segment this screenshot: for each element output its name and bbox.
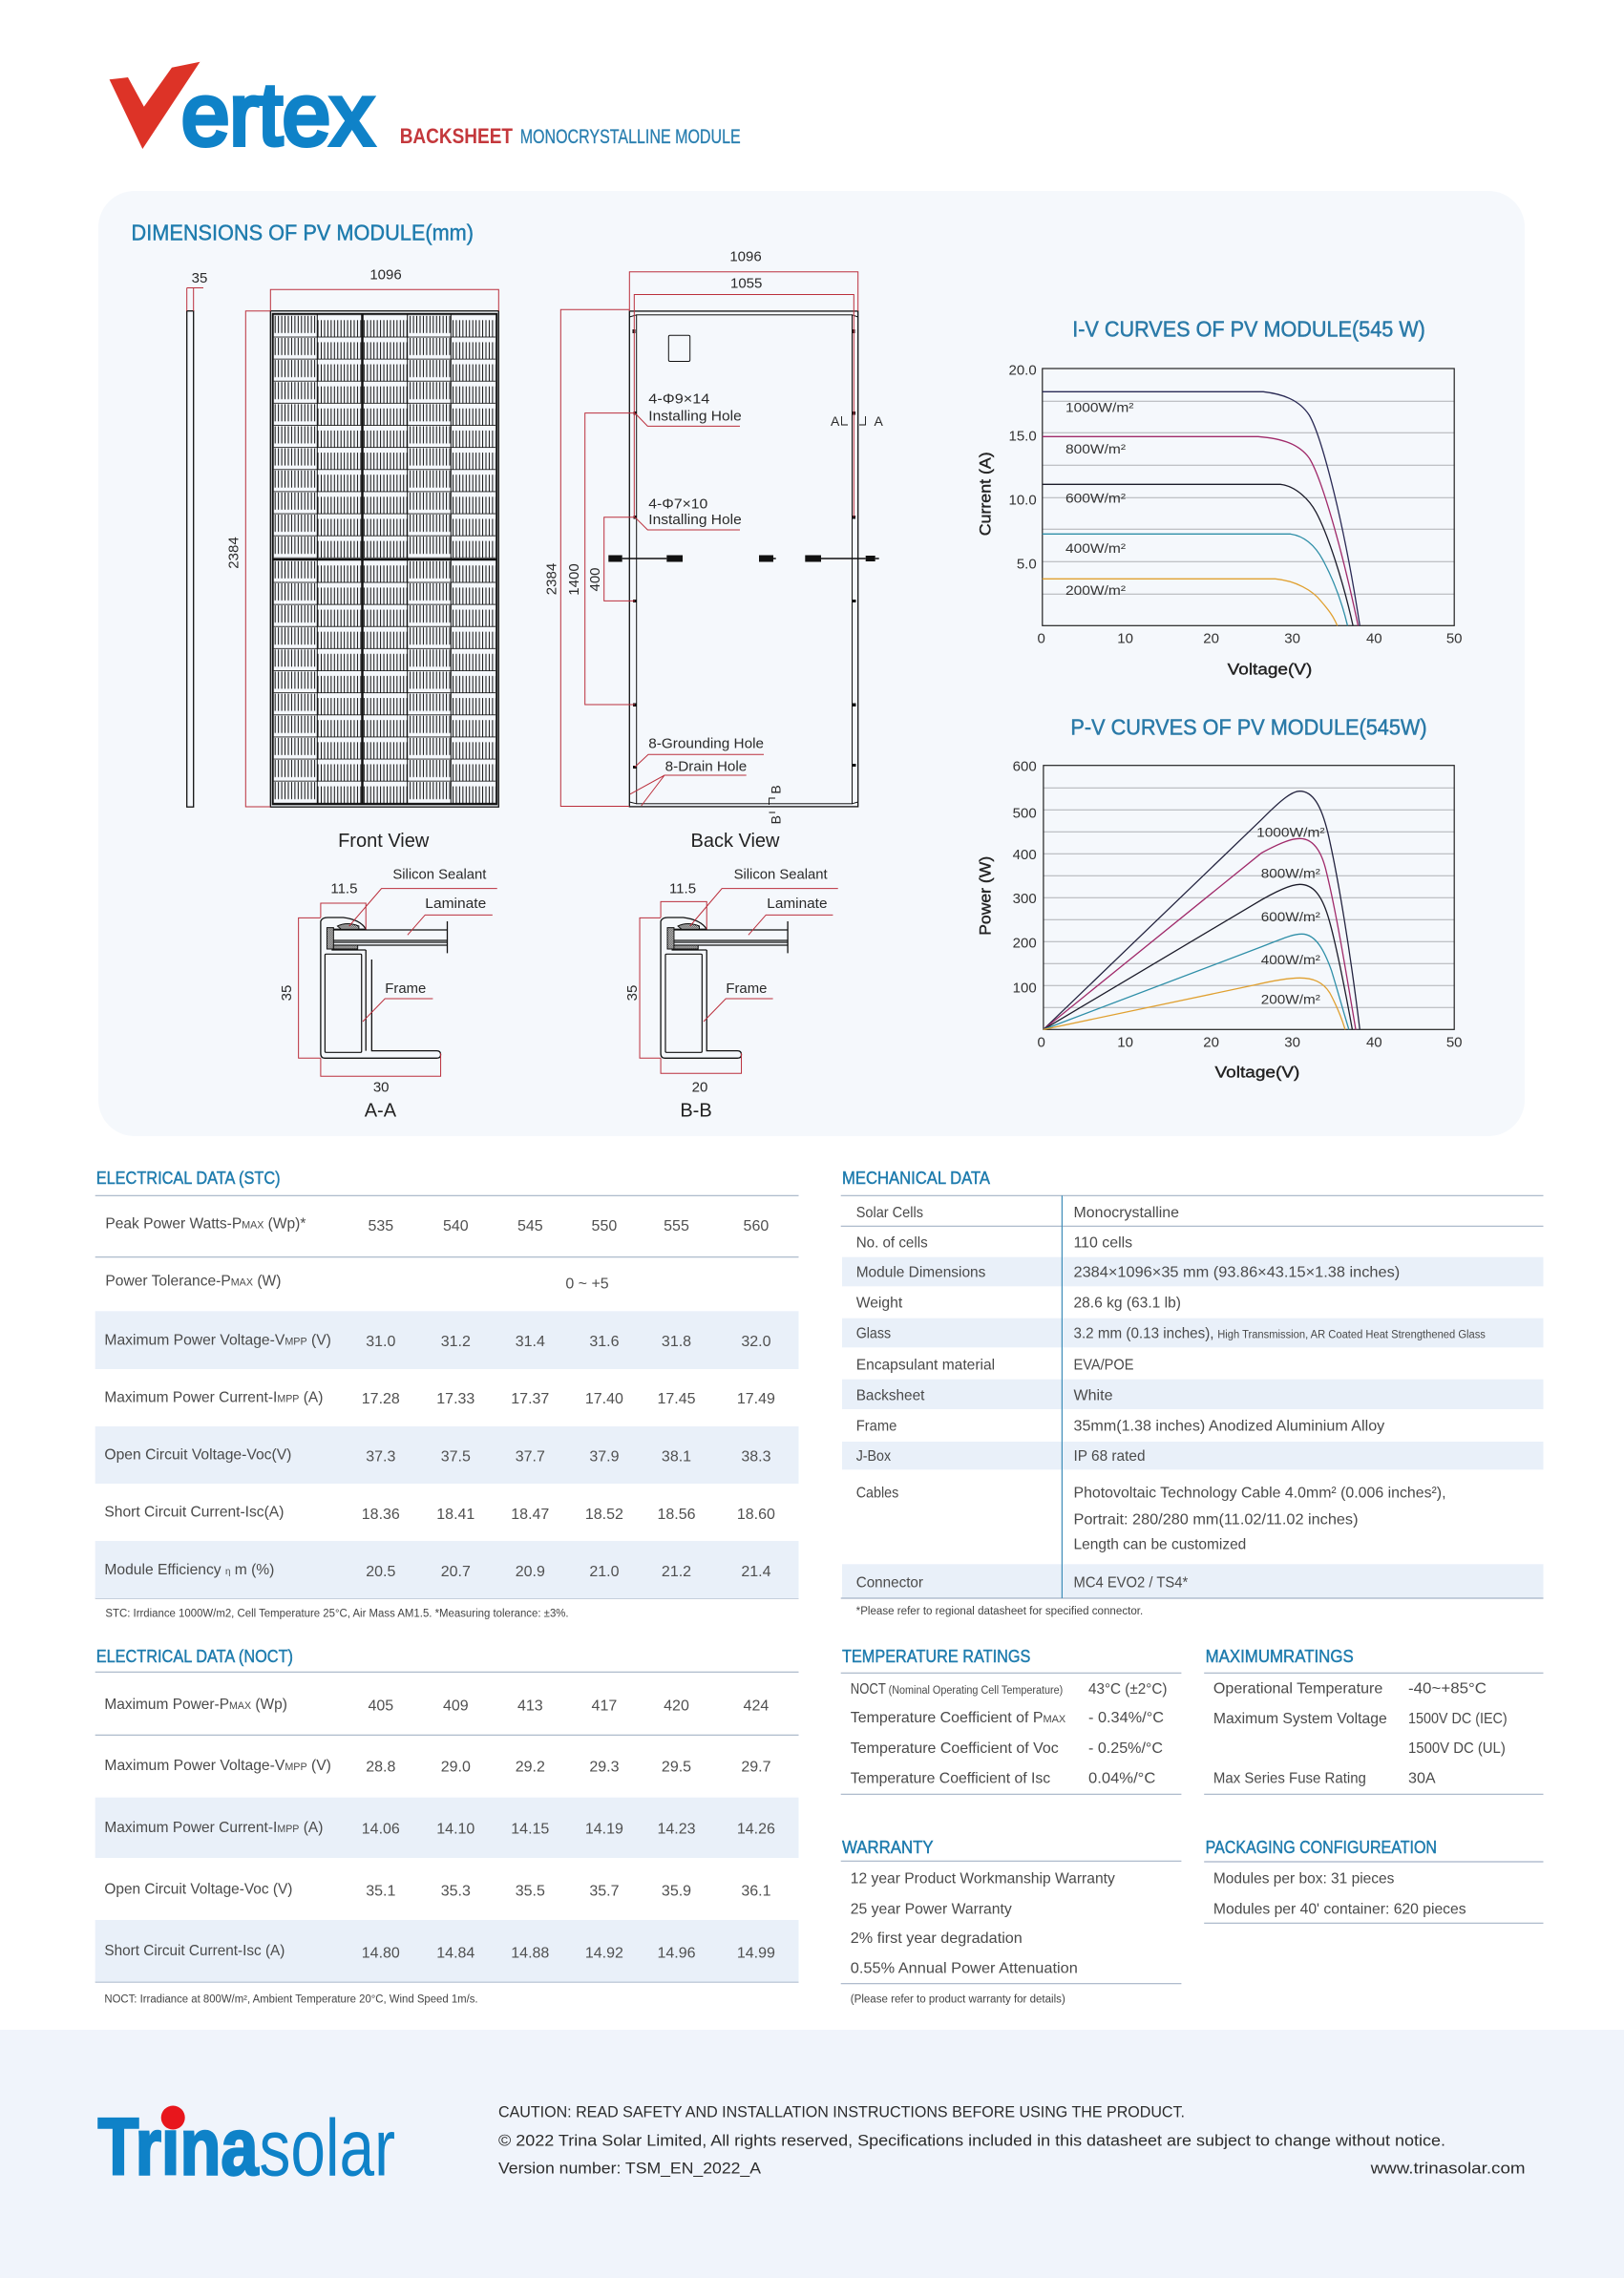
section drawing: B-B: 20 xyxy=(692,1079,707,1095)
table: maximum ratings: 1500V DC (IEC) xyxy=(1408,1711,1508,1727)
section drawing: B-B: 11.5 xyxy=(669,881,696,897)
chart: P-V curves: 0 xyxy=(1038,1035,1045,1051)
row: module efficiency: 21.4 xyxy=(741,1564,771,1580)
row: Isc NOCT: Short Circuit Current-Isc (A) xyxy=(104,1943,285,1959)
row: module dimensions: 2384×1096×35 mm (93.86×43.15×1.38 inches) xyxy=(1073,1265,1400,1281)
row: Isc: 18.56 xyxy=(657,1507,696,1523)
row: cables: Portrait: 280/280 mm(11.02/11.02 inches) xyxy=(1073,1512,1358,1529)
row: peak power: 545 xyxy=(517,1218,543,1234)
table: temperature ratings: 43°C (±2°C) xyxy=(1088,1681,1167,1698)
heading: dimensions: DIMENSIONS OF PV MODULE(mm) xyxy=(132,221,474,245)
row: Voc: 37.9 xyxy=(589,1449,620,1466)
footnote: NOCT: NOCT: Irradiance at 800W/m², Ambient Temperature 20°C, Wind Speed 1m/s. xyxy=(104,1994,478,2006)
chart: P-V curves: 100 xyxy=(1013,980,1037,996)
chart: P-V curves: 400W/m² xyxy=(1261,952,1320,967)
row: maximum power: 409 xyxy=(443,1698,469,1715)
row: j-box: J-Box xyxy=(856,1448,891,1465)
row: connector: MC4 EVO2 / TS4* xyxy=(1073,1575,1188,1592)
row: peak power: 560 xyxy=(744,1218,769,1234)
row: Vmpp: 31.8 xyxy=(662,1334,691,1350)
back view drawing: 4-Φ9×14 xyxy=(648,391,709,408)
row: solar cells xyxy=(856,1205,1179,1221)
row: Vmpp NOCT: 29.3 xyxy=(589,1760,620,1776)
table: maximum ratings: Max Series Fuse Rating xyxy=(1213,1771,1366,1787)
section drawing: B-B xyxy=(624,867,838,1121)
row: maximum power: 420 xyxy=(664,1698,689,1715)
row: Isc NOCT: 14.88 xyxy=(511,1946,549,1962)
footer caution text: © 2022 Trina Solar Limited, All rights reserved, Specifications included in this datasheet are subject to change without notice. xyxy=(498,2131,1445,2149)
row: connector: Connector xyxy=(856,1575,924,1592)
row: Voc NOCT: 35.9 xyxy=(662,1884,691,1900)
front view drawing: 2384 xyxy=(225,537,243,569)
row: no. of cells: No. of cells xyxy=(856,1235,928,1252)
chart: P-V curves: 200W/m² xyxy=(1261,992,1320,1007)
section drawing: A-A xyxy=(279,867,497,1121)
section drawing: A-A: 35 xyxy=(279,985,295,1001)
row: Voc: 38.1 xyxy=(662,1449,691,1466)
back view drawing: 1400 xyxy=(566,563,582,596)
chart: I-V curves: 5.0 xyxy=(1017,557,1037,573)
side view drawing xyxy=(187,270,207,807)
row: j-box: IP 68 rated xyxy=(1073,1448,1146,1465)
row: Impp NOCT: Maximum Power Current-IMPP (A) xyxy=(104,1820,323,1836)
row: module efficiency: 21.0 xyxy=(589,1564,620,1580)
chart title: P-V: P-V CURVES OF PV MODULE(545W) xyxy=(1070,714,1427,739)
section drawing: A-A: 11.5 xyxy=(330,881,357,897)
row: Voc NOCT: 36.1 xyxy=(741,1884,771,1900)
table: maximum ratings: 30A xyxy=(1408,1771,1436,1787)
chart: I-V curves: 15.0 xyxy=(1008,429,1037,445)
row: Voc xyxy=(95,1426,798,1484)
table: temperature ratings: Temperature Coefficient of Voc xyxy=(851,1740,1059,1757)
row: Isc NOCT: 14.80 xyxy=(362,1946,400,1962)
chart: P-V curves: 300 xyxy=(1013,891,1037,907)
table: maximum ratings xyxy=(1204,1647,1543,1794)
row: Voc NOCT: 35.1 xyxy=(366,1884,395,1900)
chart: I-V curves: 20 xyxy=(1203,630,1219,646)
chart: P-V curves: 1000W/m² xyxy=(1256,825,1325,840)
heading: mechanical data: MECHANICAL DATA xyxy=(842,1169,990,1188)
row: Impp: 17.49 xyxy=(737,1391,775,1407)
table: temperature ratings: - 0.25%/°C xyxy=(1088,1740,1163,1757)
row: Voc: 37.7 xyxy=(516,1449,545,1466)
row: power tolerance: Power Tolerance-PMAX (W) xyxy=(105,1274,281,1290)
row: frame: Frame xyxy=(856,1418,896,1434)
row: Vmpp NOCT: 29.5 xyxy=(662,1760,691,1776)
table: maximum ratings: 1500V DC (UL) xyxy=(1408,1740,1506,1757)
heading: electrical data NOCT: ELECTRICAL DATA (NOCT) xyxy=(96,1647,293,1666)
row: Vmpp NOCT: Maximum Power Voltage-VMPP (V) xyxy=(104,1758,331,1774)
row: glass: High Transmission, AR Coated Heat Strengthened Glass xyxy=(1217,1330,1486,1341)
subtitle: backsheet monocrystalline module: BACKSHEET xyxy=(400,124,513,148)
row: Impp: 17.37 xyxy=(511,1391,549,1407)
table: maximum ratings: Maximum System Voltage xyxy=(1213,1711,1387,1727)
row: Impp: Maximum Power Current-IMPP (A) xyxy=(104,1389,323,1405)
table: electrical data NOCT xyxy=(95,1647,798,2006)
row: Impp NOCT xyxy=(95,1798,798,1858)
row: solar cells: Monocrystalline xyxy=(1073,1205,1179,1221)
chart: I-V curves: 40 xyxy=(1366,630,1382,646)
chart: P-V curves: 50 xyxy=(1446,1035,1463,1051)
chart: P-V curves: Voltage(V) xyxy=(1214,1063,1299,1081)
row: Voc NOCT: 35.3 xyxy=(441,1884,471,1900)
back view drawing: 400 xyxy=(587,567,603,592)
table: warranty: 12 year Product Workmanship Warranty xyxy=(851,1870,1115,1887)
heading: electrical data STC: ELECTRICAL DATA (STC) xyxy=(96,1169,281,1188)
table: maximum ratings: -40~+85°C xyxy=(1408,1680,1487,1697)
row: Isc: 18.60 xyxy=(737,1507,775,1523)
chart: I-V curves xyxy=(976,316,1463,679)
row: power tolerance xyxy=(105,1274,609,1292)
row: frame: 35mm(1.38 inches) Anodized Aluminium Alloy xyxy=(1073,1418,1384,1434)
row: Impp xyxy=(104,1389,775,1407)
front view drawing: 1096 xyxy=(369,267,402,284)
row: Isc NOCT: 14.92 xyxy=(585,1946,623,1962)
heading: temperature ratings: TEMPERATURE RATINGS xyxy=(842,1647,1030,1666)
row: Isc NOCT: 14.99 xyxy=(737,1946,775,1962)
row: Impp: 17.40 xyxy=(585,1391,623,1407)
row: Isc: 18.41 xyxy=(436,1507,475,1523)
chart: P-V curves: 800W/m² xyxy=(1261,865,1320,880)
chart: P-V curves: 600W/m² xyxy=(1261,909,1320,924)
back view drawing: 1055 xyxy=(730,275,762,291)
row: weight xyxy=(856,1295,1181,1311)
row: Vmpp: 32.0 xyxy=(741,1334,771,1350)
table: temperature ratings: (Nominal Operating Cell Temperature) xyxy=(889,1685,1063,1697)
back view drawing: A xyxy=(875,413,884,429)
row: backsheet xyxy=(856,1388,1113,1404)
row: connector xyxy=(856,1575,1188,1592)
chart: I-V curves: 10.0 xyxy=(1008,492,1037,508)
chart: P-V curves xyxy=(976,714,1463,1081)
row: Impp NOCT: 14.26 xyxy=(737,1822,775,1838)
table: packaging configuration: Modules per box: 31 pieces xyxy=(1213,1870,1394,1887)
table: packaging configuration: Modules per 40' container: 620 pieces xyxy=(1213,1901,1466,1917)
row: peak power: Peak Power Watts-PMAX (Wp)* xyxy=(105,1216,306,1233)
chart: I-V curves: 20.0 xyxy=(1008,363,1037,379)
panel: dimensions and curves xyxy=(98,191,1525,1136)
subtitle: backsheet monocrystalline module xyxy=(400,124,741,148)
row: module efficiency: 20.9 xyxy=(516,1564,545,1580)
chart: I-V curves: 600W/m² xyxy=(1065,491,1126,506)
chart: I-V curves: 800W/m² xyxy=(1065,441,1126,456)
section drawing: A-A: Frame xyxy=(385,981,426,997)
row: peak power xyxy=(105,1216,769,1234)
heading: maximum ratings: MAXIMUMRATINGS xyxy=(1206,1647,1354,1666)
row: Vmpp NOCT xyxy=(104,1758,771,1776)
chart: P-V curves: 40 xyxy=(1366,1035,1382,1051)
chart: P-V curves: Power (W) xyxy=(976,856,995,936)
section drawing: B-B: Laminate xyxy=(767,896,827,912)
row: module dimensions: Module Dimensions xyxy=(856,1265,985,1281)
row: frame xyxy=(856,1418,1384,1434)
row: cables: Cables xyxy=(856,1486,898,1502)
row: Vmpp NOCT: 29.2 xyxy=(516,1760,545,1776)
chart: I-V curves: Voltage(V) xyxy=(1228,661,1312,679)
row: module efficiency: 20.7 xyxy=(441,1564,471,1580)
row: maximum power xyxy=(104,1697,769,1715)
row: solar cells: Solar Cells xyxy=(856,1205,923,1221)
chart: P-V curves: 200 xyxy=(1013,936,1037,952)
footnote: STC: STC: Irrdiance 1000W/m2, Cell Temperature 25°C, Air Mass AM1.5. *Measuring tolerance: ±3%. xyxy=(105,1608,569,1619)
chart: P-V curves: 600 xyxy=(1013,758,1037,774)
row: maximum power: 424 xyxy=(744,1698,769,1715)
section drawing: A-A: Silicon Sealant xyxy=(392,867,487,883)
logo: Trinasolar xyxy=(97,2101,395,2192)
back view drawing xyxy=(544,249,884,824)
table: mechanical data xyxy=(841,1169,1543,1617)
section drawing: A-A: Laminate xyxy=(425,896,486,912)
row: module efficiency xyxy=(95,1541,798,1598)
label: back view: Back View xyxy=(690,831,780,852)
row: peak power: 550 xyxy=(592,1218,617,1234)
row: Impp NOCT: 14.15 xyxy=(511,1822,549,1838)
chart: I-V curves: 10 xyxy=(1117,630,1133,646)
row: module efficiency: Module Efficiency η m (%) xyxy=(104,1562,274,1578)
row: Impp NOCT: 14.23 xyxy=(657,1822,696,1838)
row: module dimensions xyxy=(856,1265,1400,1281)
row: power tolerance: 0 ~ +5 xyxy=(565,1276,609,1292)
row: maximum power: 417 xyxy=(592,1698,617,1715)
section drawing: B-B: Frame xyxy=(726,981,767,997)
row: Vmpp: 31.0 xyxy=(366,1334,395,1350)
row: Impp: 17.33 xyxy=(436,1391,475,1407)
row: Voc NOCT xyxy=(104,1881,771,1900)
row: weight: Weight xyxy=(856,1295,903,1311)
row: Isc: 18.52 xyxy=(585,1507,623,1523)
row: Impp NOCT: 14.10 xyxy=(436,1822,475,1838)
row: Isc xyxy=(104,1504,775,1523)
back view drawing: B xyxy=(768,785,783,794)
chart title: I-V: I-V CURVES OF PV MODULE(545 W) xyxy=(1072,316,1425,341)
section drawing: A-A: A-A xyxy=(365,1100,397,1121)
back view drawing: Installing Hole xyxy=(648,409,742,424)
row: backsheet: White xyxy=(1073,1388,1113,1404)
row: Vmpp: 31.2 xyxy=(441,1334,471,1350)
back view drawing: 8-Grounding Hole xyxy=(648,736,764,752)
row: Isc: 18.36 xyxy=(362,1507,400,1523)
footer caution text: CAUTION: READ SAFETY AND INSTALLATION INSTRUCTIONS BEFORE USING THE PRODUCT. xyxy=(498,2103,1185,2121)
back view drawing: B xyxy=(768,815,783,824)
connector cables xyxy=(608,556,879,561)
table: temperature ratings: - 0.34%/°C xyxy=(1088,1710,1164,1726)
table: temperature ratings: 0.04%/°C xyxy=(1088,1771,1155,1787)
row: glass: Glass xyxy=(856,1326,891,1342)
table: electrical data STC xyxy=(95,1169,798,1619)
row: Isc NOCT xyxy=(95,1920,798,1982)
row: peak power: 555 xyxy=(664,1218,689,1234)
footer caution text xyxy=(498,2103,1445,2178)
row: cables: Photovoltaic Technology Cable 4.0mm² (0.006 inches²), xyxy=(1073,1486,1445,1502)
table: temperature ratings: Temperature Coefficient of PMAX xyxy=(851,1710,1066,1726)
row: Voc: 37.3 xyxy=(366,1449,395,1466)
row: cables xyxy=(856,1486,1445,1553)
row: peak power: 535 xyxy=(368,1218,393,1234)
I-V curves lines xyxy=(1043,391,1360,625)
table: temperature ratings: NOCT xyxy=(851,1681,886,1698)
row: maximum power: Maximum Power-PMAX (Wp) xyxy=(104,1697,287,1713)
heading: warranty: WARRANTY xyxy=(842,1838,934,1857)
row: no. of cells xyxy=(856,1235,1132,1252)
back view drawing: 4-Φ7×10 xyxy=(648,496,707,513)
footnote: connector: *Please refer to regional datasheet for specified connector. xyxy=(856,1606,1143,1617)
chart: I-V curves: 0 xyxy=(1038,630,1045,646)
row: encapsulant: Encapsulant material xyxy=(856,1358,995,1374)
row: Isc: Short Circuit Current-Isc(A) xyxy=(104,1504,284,1520)
row: maximum power: 405 xyxy=(368,1698,393,1715)
table: warranty: 2% first year degradation xyxy=(851,1930,1023,1947)
table: temperature ratings: Temperature Coefficient of Isc xyxy=(851,1771,1050,1787)
row: Impp: 17.45 xyxy=(657,1391,696,1407)
row: backsheet: Backsheet xyxy=(856,1388,925,1404)
subtitle: backsheet monocrystalline module: MONOCRYSTALLINE MODULE xyxy=(520,126,741,148)
row: module efficiency: 21.2 xyxy=(662,1564,691,1580)
row: Vmpp NOCT: 28.8 xyxy=(366,1760,395,1776)
heading: packaging configuration: PACKAGING CONFIGUREATION xyxy=(1206,1838,1437,1857)
chart: P-V curves: 500 xyxy=(1013,806,1037,822)
row: Voc NOCT: 35.5 xyxy=(516,1884,545,1900)
row: Isc NOCT: 14.84 xyxy=(436,1946,475,1962)
chart: I-V curves: 200W/m² xyxy=(1065,582,1126,598)
row: Voc: 38.3 xyxy=(741,1449,771,1466)
row: no. of cells: 110 cells xyxy=(1073,1235,1132,1252)
table: temperature ratings xyxy=(841,1647,1181,1794)
row: peak power: 540 xyxy=(443,1218,469,1234)
footer band xyxy=(0,2030,1624,2278)
footer caution text: Version number: TSM_EN_2022_A xyxy=(498,2160,762,2178)
chart: I-V curves: 1000W/m² xyxy=(1065,400,1134,415)
row: Voc NOCT: Open Circuit Voltage-Voc (V) xyxy=(104,1881,292,1897)
row: Vmpp: 31.6 xyxy=(589,1334,620,1350)
back view drawing: 8-Drain Hole xyxy=(665,758,747,774)
row: Vmpp: Maximum Power Voltage-VMPP (V) xyxy=(104,1332,331,1348)
row: glass: 3.2 mm (0.13 inches), xyxy=(1073,1326,1214,1342)
logo: Vertex xyxy=(110,62,373,164)
row: encapsulant xyxy=(856,1358,1134,1374)
back view drawing: 1096 xyxy=(729,249,762,265)
row: glass xyxy=(856,1326,1486,1342)
row: Impp NOCT: 14.06 xyxy=(362,1822,400,1838)
row: Voc: Open Circuit Voltage-Voc(V) xyxy=(104,1446,291,1463)
footer website: www.trinasolar.com xyxy=(1369,2160,1526,2178)
P-V curves lines xyxy=(1044,791,1360,1029)
table: warranty: (Please refer to product warranty for details) xyxy=(851,1994,1065,2006)
chart: I-V curves: 30 xyxy=(1284,630,1300,646)
back view drawing: 2384 xyxy=(544,563,559,595)
row: Impp: 17.28 xyxy=(362,1391,400,1407)
row: Vmpp: 31.4 xyxy=(516,1334,545,1350)
section drawing: A-A: 30 xyxy=(373,1079,390,1095)
row: maximum power: 413 xyxy=(517,1698,543,1715)
chart: P-V curves: 30 xyxy=(1284,1035,1300,1051)
chart: I-V curves: 400W/m² xyxy=(1065,540,1126,556)
front view drawing xyxy=(225,267,498,807)
back view drawing: A xyxy=(831,413,840,429)
chart: P-V curves: 10 xyxy=(1117,1035,1133,1051)
table: warranty: 0.55% Annual Power Attenuation xyxy=(851,1961,1078,1977)
row: module efficiency: 20.5 xyxy=(366,1564,395,1580)
row: Vmpp xyxy=(95,1311,798,1369)
table: warranty: 25 year Power Warranty xyxy=(851,1901,1012,1917)
row: weight: 28.6 kg (63.1 lb) xyxy=(1073,1295,1181,1311)
row: Voc NOCT: 35.7 xyxy=(589,1884,620,1900)
row: Vmpp NOCT: 29.0 xyxy=(441,1760,471,1776)
label: front view: Front View xyxy=(338,831,430,852)
section drawing: B-B: B-B xyxy=(680,1100,712,1121)
chart: P-V curves: 20 xyxy=(1203,1035,1219,1051)
table: maximum ratings: Operational Temperature xyxy=(1213,1680,1382,1697)
logo: Trinasolar: solar xyxy=(260,2102,395,2192)
chart: I-V curves: 50 xyxy=(1446,630,1463,646)
row: Isc NOCT: 14.96 xyxy=(657,1946,696,1962)
section drawing: B-B: Silicon Sealant xyxy=(734,867,828,883)
row: Isc: 18.47 xyxy=(511,1507,549,1523)
chart: P-V curves: 400 xyxy=(1013,847,1037,863)
row: cables: Length can be customized xyxy=(1073,1537,1246,1553)
row: encapsulant: EVA/POE xyxy=(1073,1358,1134,1374)
row: Voc: 37.5 xyxy=(441,1449,471,1466)
table: packaging configuration xyxy=(1204,1838,1543,1923)
side view drawing: 35 xyxy=(192,270,207,286)
row: Impp NOCT: 14.19 xyxy=(585,1822,623,1838)
row: j-box xyxy=(856,1448,1146,1465)
row: Vmpp NOCT: 29.7 xyxy=(741,1760,771,1776)
table: warranty xyxy=(841,1838,1181,2006)
logo: Vertex: ertex xyxy=(181,67,374,164)
logo: Trinasolar: Trina xyxy=(97,2101,260,2191)
section drawing: B-B: 35 xyxy=(624,985,641,1001)
chart: I-V curves: Current (A) xyxy=(976,452,995,536)
back view drawing: Installing Hole xyxy=(648,512,742,528)
